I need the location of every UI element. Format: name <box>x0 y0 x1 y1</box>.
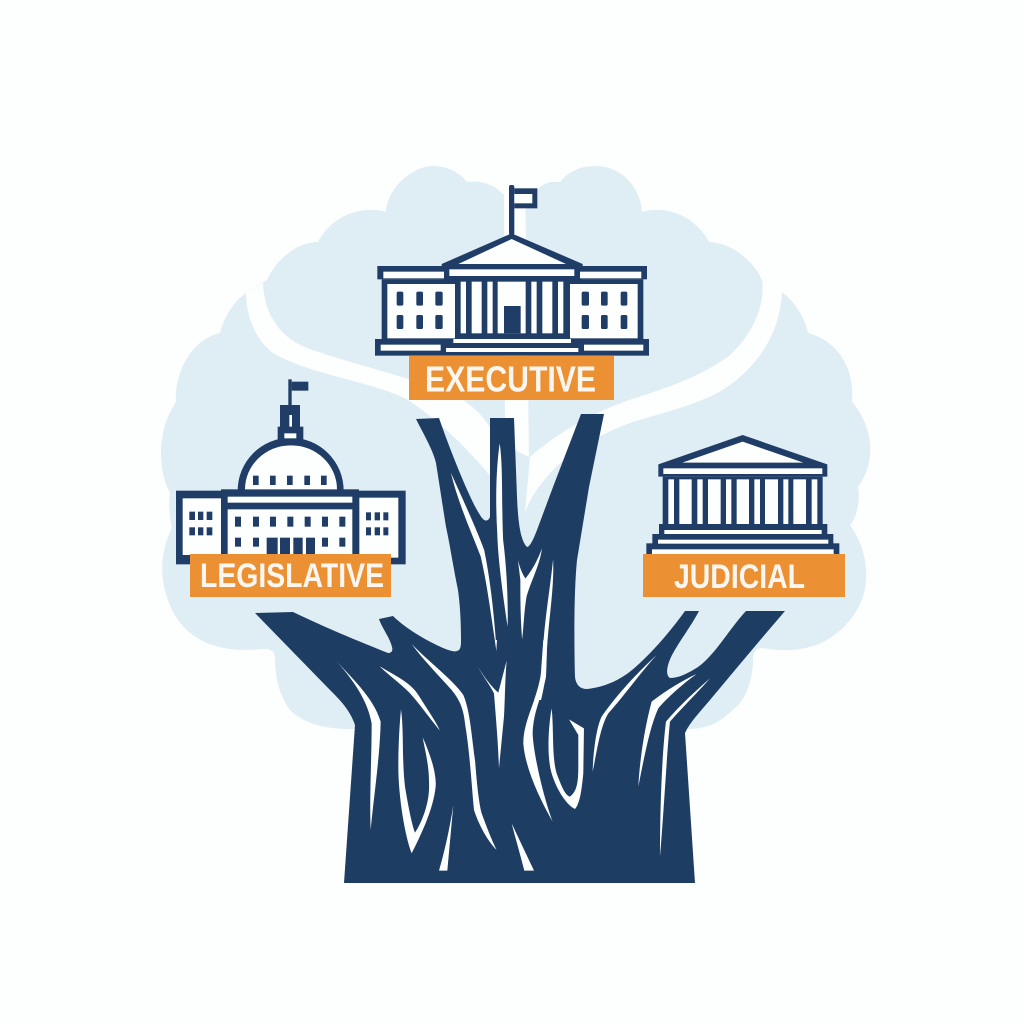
executive label: EXECUTIVE <box>425 358 596 400</box>
trunk veins: lower <box>335 640 710 871</box>
judicial label: JUDICIAL <box>674 558 805 596</box>
legislative label: LEGISLATIVE <box>200 557 384 595</box>
judicial label <box>643 554 845 597</box>
tree canopy cloud <box>161 166 870 729</box>
judicial building <box>646 435 839 555</box>
tree trunk and branches <box>255 414 785 883</box>
legislative building <box>176 379 406 564</box>
white background branches <box>246 176 782 513</box>
trunk veins: upper <box>451 443 553 700</box>
executive building <box>375 185 649 356</box>
